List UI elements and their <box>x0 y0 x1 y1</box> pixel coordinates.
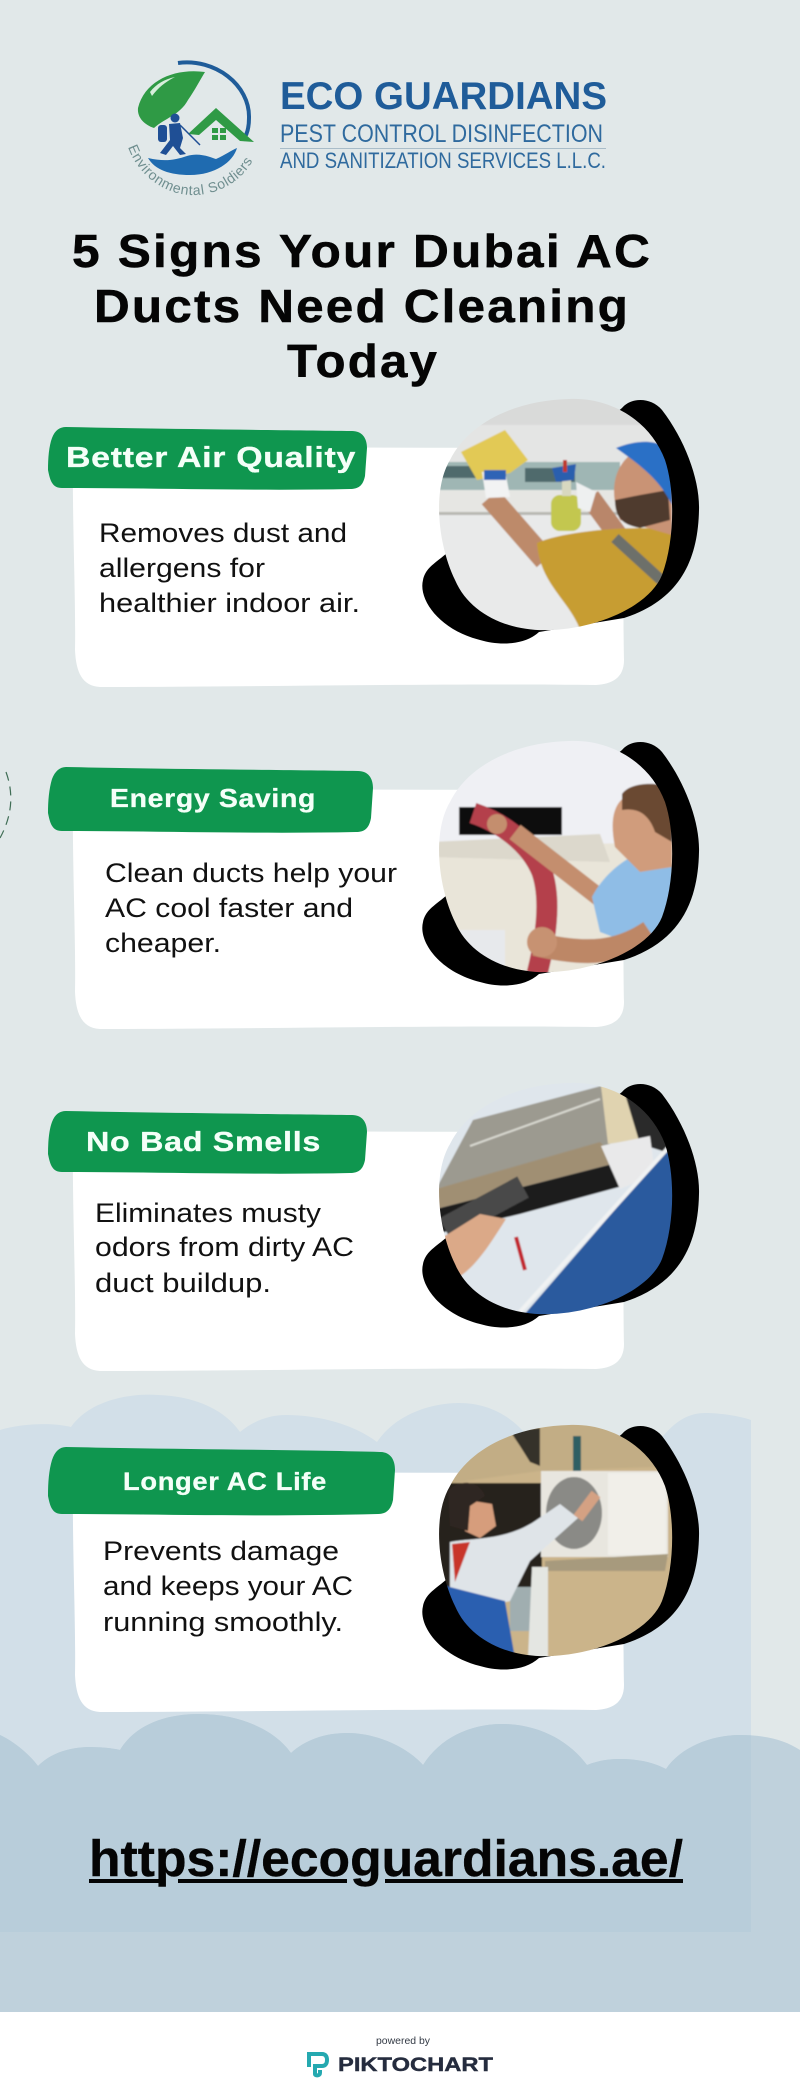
body text: cheaper. <box>105 928 221 958</box>
logo subtitle line 1: PEST CONTROL DISINFECTION <box>280 120 603 148</box>
heading text: Longer AC Life <box>123 1468 327 1496</box>
body text <box>95 1198 354 1298</box>
body text: odors from dirty AC <box>95 1232 354 1262</box>
body text <box>103 1536 353 1637</box>
logo <box>128 60 607 196</box>
body text: healthier indoor air. <box>99 588 360 618</box>
panel: no bad smells <box>48 1079 699 1371</box>
body text: and keeps your AC <box>103 1571 353 1601</box>
icon: house <box>188 108 254 142</box>
panel: better air quality <box>48 395 699 687</box>
heading text: Better Air Quality <box>66 442 356 474</box>
body text: duct buildup. <box>95 1268 271 1298</box>
logo tagline: Environmental Soldiers: Environmental Soldiers <box>128 144 252 196</box>
icon: technician <box>158 114 200 155</box>
photo: AC unit being washed with cover <box>422 1079 699 1328</box>
title <box>72 225 652 387</box>
piktochart wordmark: PIKTOCHART <box>338 2055 493 2076</box>
logo subtitle line 2: AND SANITIZATION SERVICES L.L.C. <box>280 148 606 173</box>
title: Ducts Need Cleaning <box>94 280 630 332</box>
body text: Eliminates musty <box>95 1198 322 1228</box>
logo name: ECO GUARDIANS <box>280 75 607 118</box>
heading text: No Bad Smells <box>86 1126 321 1157</box>
title: Today <box>287 335 439 387</box>
photo: technician vacuuming duct with red hose <box>422 737 699 986</box>
body text: Removes dust and <box>99 518 347 548</box>
card background <box>73 1472 624 1712</box>
panel: energy saving <box>48 737 699 1029</box>
body text <box>105 858 397 958</box>
body text: Prevents damage <box>103 1536 339 1566</box>
body text: Clean ducts help your <box>105 858 397 888</box>
title: 5 Signs Your Dubai AC <box>72 225 652 277</box>
body text: allergens for <box>99 553 265 583</box>
card background <box>73 447 624 687</box>
panel: longer ac life <box>48 1421 699 1712</box>
heading pill <box>48 427 367 490</box>
icon: blue ring <box>178 62 249 140</box>
background: dark clouds <box>0 1714 800 2012</box>
background: light clouds <box>0 1395 751 1932</box>
icon: piktochart logo <box>309 2054 327 2075</box>
card background <box>73 789 624 1029</box>
website url: https://ecoguardians.ae/ <box>89 1830 683 1887</box>
body text: running smoothly. <box>103 1607 343 1637</box>
photo: technician wiping wall AC <box>422 395 699 644</box>
icon: hand <box>148 148 237 175</box>
icon: leaf <box>138 71 205 128</box>
heading pill <box>48 1447 395 1515</box>
decorative dashed arc <box>0 772 11 838</box>
card background <box>73 1131 624 1371</box>
footer <box>0 2012 800 2097</box>
heading pill <box>48 1111 367 1174</box>
heading pill <box>48 767 373 833</box>
body text <box>99 518 360 618</box>
photo: technician servicing outdoor AC unit <box>422 1421 699 1670</box>
heading text: Energy Saving <box>110 783 316 813</box>
powered by: powered by <box>376 2035 431 2047</box>
body text: AC cool faster and <box>105 893 353 923</box>
